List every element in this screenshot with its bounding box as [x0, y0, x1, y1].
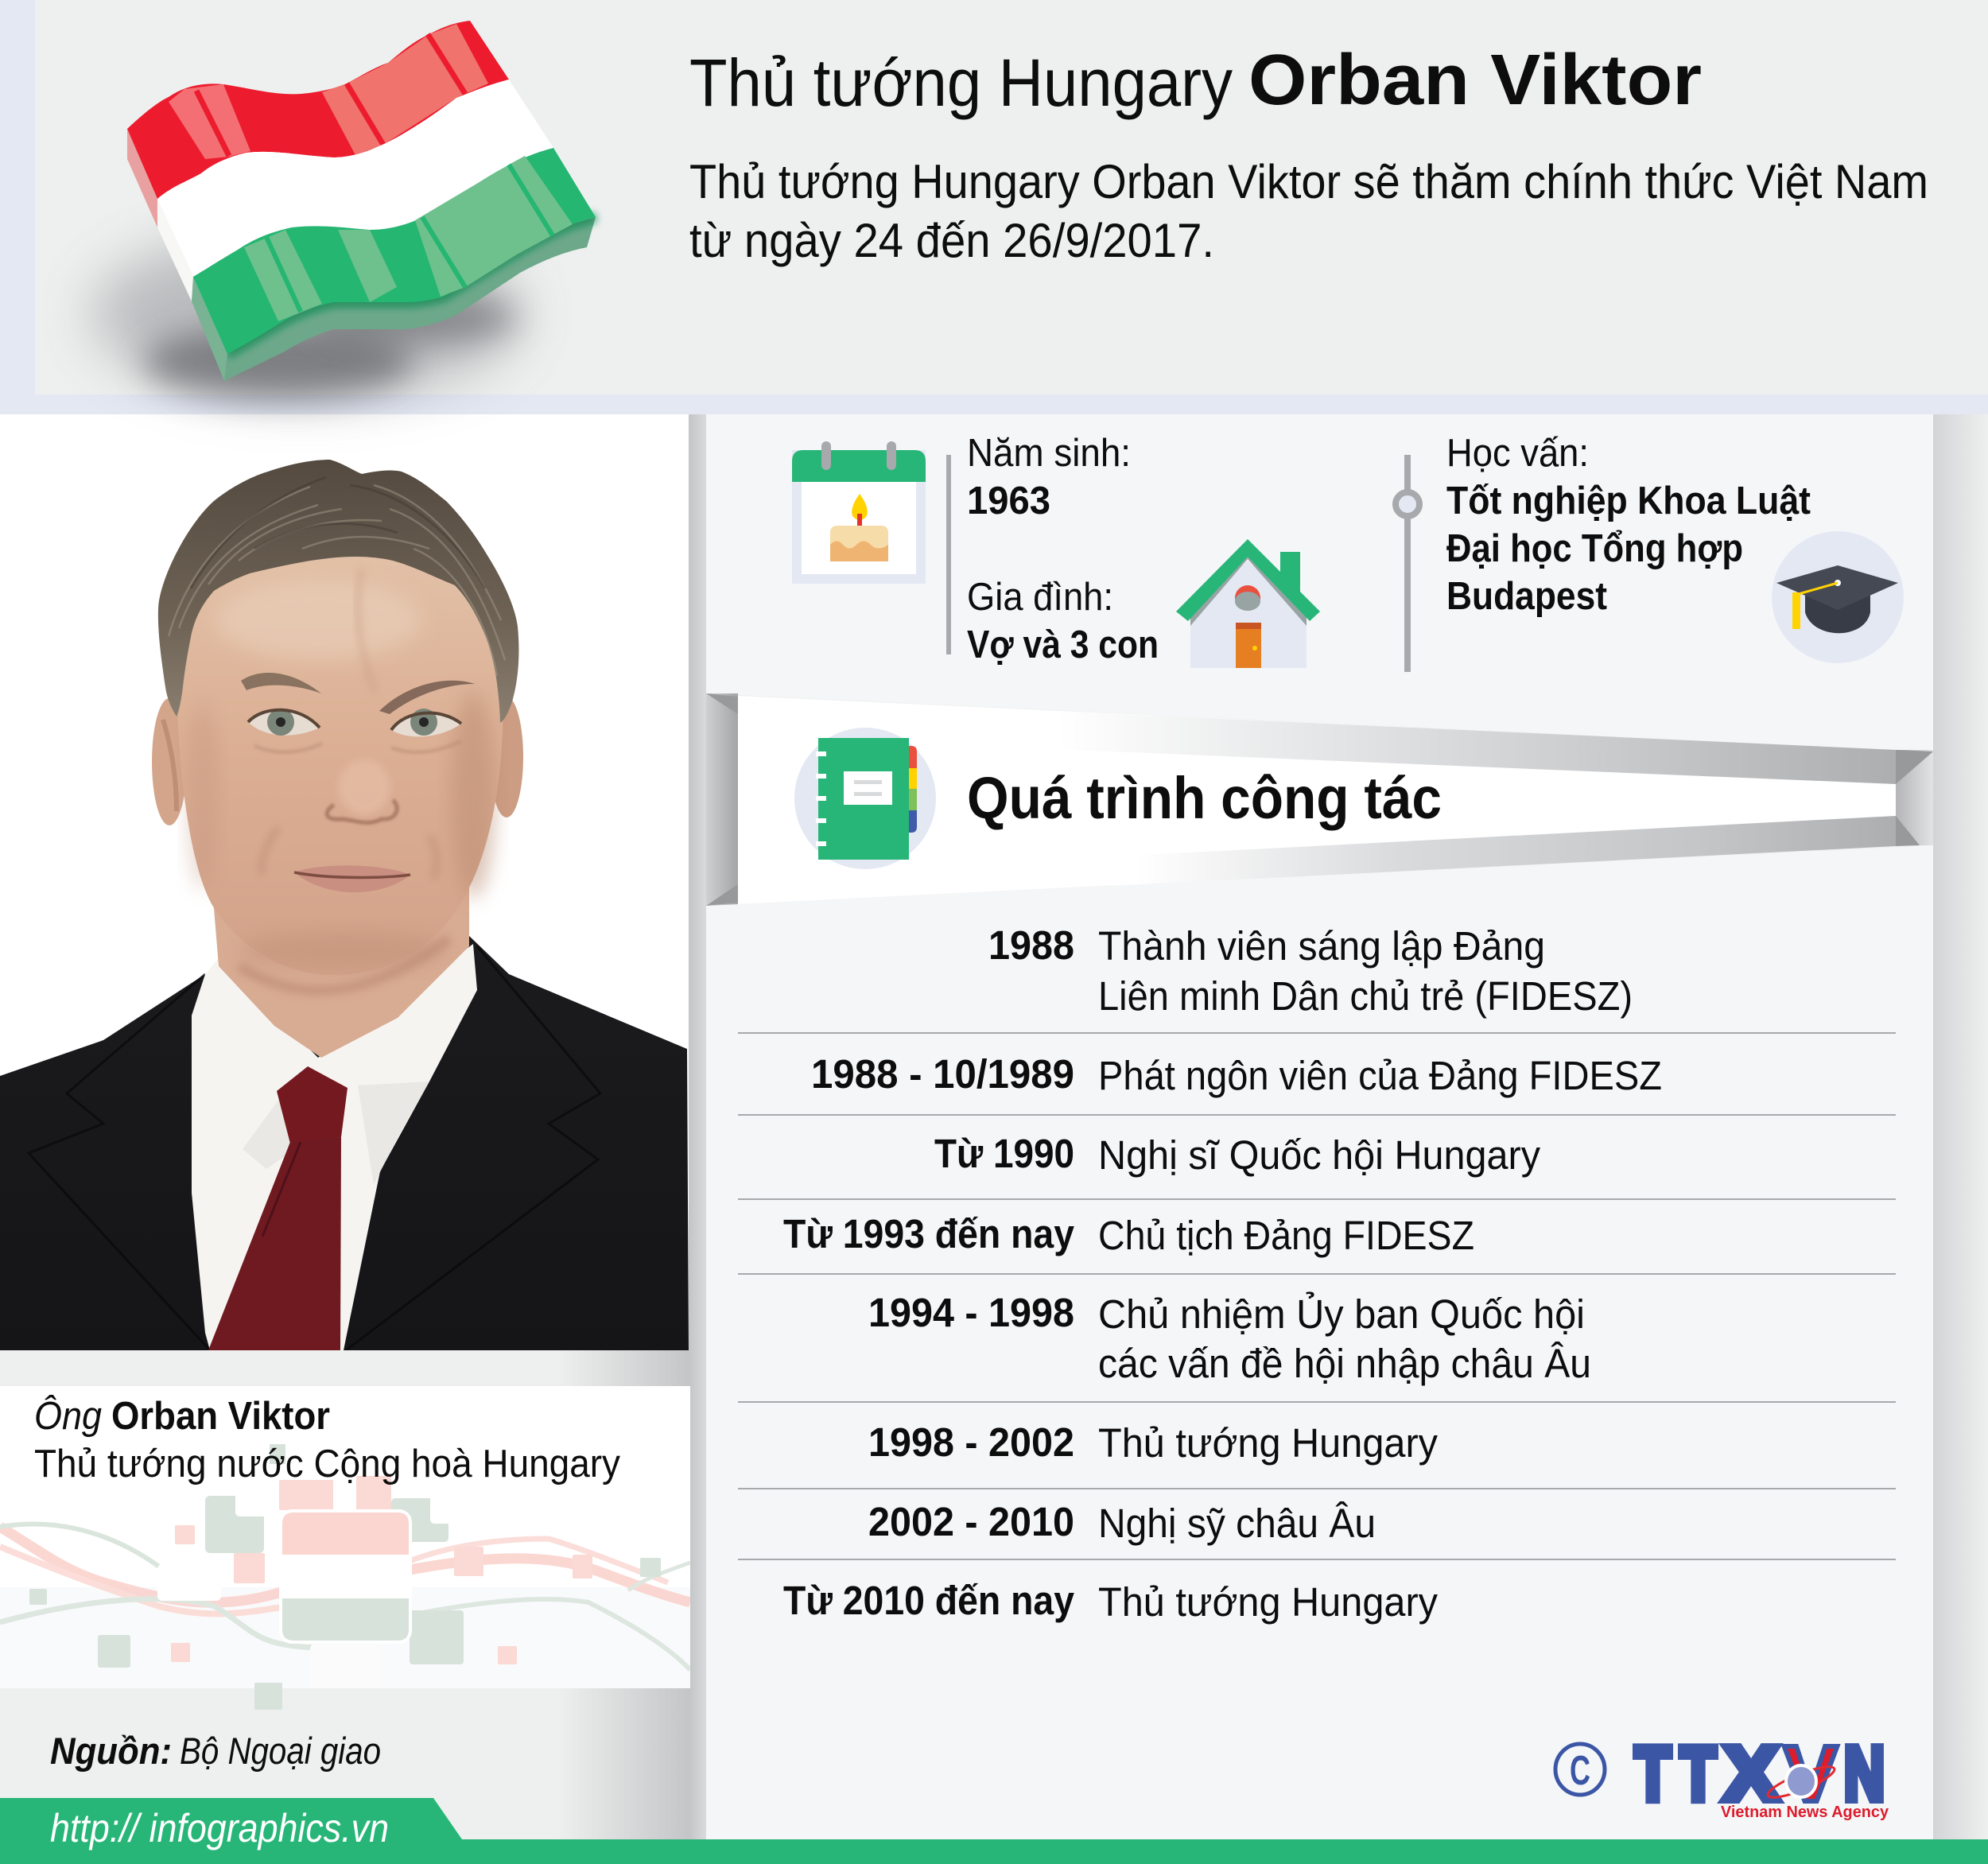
intro text: Thủ tướng Hungary Orban Viktor sẽ thăm chính thức Việt Nam: [689, 155, 1928, 208]
hair: [158, 460, 518, 723]
row from 2010: Thủ tướng Hungary: [1098, 1579, 1438, 1625]
row 1988: Thành viên sáng lập Đảng: [1098, 923, 1545, 969]
source: Nguồn:: [50, 1730, 172, 1772]
globe emblem: [1765, 1761, 1837, 1803]
logo: copyright and TTXVN: [1555, 1730, 1889, 1821]
fold corner triangles: [706, 693, 1933, 906]
mouth: [294, 865, 410, 892]
source: Bộ Ngoại giao: [180, 1730, 381, 1772]
caption panel with decorative Hungarian flag tiles: [0, 1386, 690, 1695]
right gutter shading: [1933, 414, 1988, 1839]
face: [177, 538, 503, 975]
tile overflowing below caption panel: [254, 1683, 282, 1710]
caption text: Orban Viktor: [111, 1395, 330, 1438]
row 1998-2002: [868, 1419, 1438, 1466]
divider: personal info: [946, 455, 951, 654]
row from 1990: Nghị sĩ Quốc hội Hungary: [1098, 1132, 1540, 1178]
row 1998-2002: Thủ tướng Hungary: [1098, 1420, 1438, 1466]
intro text: [689, 155, 1928, 267]
row 1998-2002: 1998 - 2002: [868, 1419, 1074, 1465]
lapels: [29, 946, 600, 1350]
photo panel background: [0, 414, 689, 1350]
row 1988: 1988: [988, 922, 1074, 968]
title: [689, 41, 1702, 120]
family: [967, 576, 1159, 666]
title: Thủ tướng Hungary: [689, 45, 1233, 120]
row 2002-2010: Nghị sỹ châu Âu: [1098, 1501, 1376, 1546]
family: Vợ và 3 con: [967, 623, 1159, 666]
right content panel lower: [706, 845, 1933, 1839]
divider: education with marker: [1396, 455, 1419, 672]
red stripe: [127, 21, 509, 199]
row from 1990: Từ 1990: [934, 1131, 1074, 1176]
icon: graduation cap: [1772, 531, 1904, 663]
row from 2010: [783, 1578, 1438, 1625]
birth year: [967, 432, 1131, 522]
row 1994-1998: các vấn đề hội nhập châu Âu: [1098, 1341, 1591, 1386]
ribbon white band: [738, 696, 1896, 904]
family: Gia đình:: [967, 576, 1113, 619]
TTXVN wordmark: X: [1724, 1731, 1778, 1816]
portrait photo of Orban Viktor: [0, 460, 689, 1350]
icon: birthday calendar: [792, 441, 926, 584]
row 1988: [988, 922, 1633, 1019]
icon: notebook: [794, 728, 936, 869]
caption text: Ông: [34, 1395, 102, 1438]
eyes: [248, 709, 461, 752]
title: Orban Viktor: [1248, 41, 1702, 120]
row 1994-1998: 1994 - 1998: [868, 1290, 1074, 1335]
green stripe: [193, 148, 596, 354]
ears: [152, 698, 187, 825]
nose: [262, 760, 437, 879]
decorative tiles: [29, 1444, 661, 1668]
source: [50, 1730, 381, 1772]
footer bar with website: http:// infographics.vn: [50, 1806, 389, 1850]
shirt: [192, 944, 477, 1350]
flag shadow: [91, 231, 521, 398]
TTXVN wordmark: N: [1844, 1731, 1885, 1816]
footer bar with website: [0, 1798, 1988, 1864]
icon: house: [1176, 539, 1320, 668]
flag thickness: [224, 217, 596, 381]
row from 1990: [934, 1131, 1540, 1178]
row 1988-1989: Phát ngôn viên của Đảng FIDESZ: [1098, 1053, 1662, 1098]
row 2002-2010: [868, 1499, 1376, 1546]
section ribbon: work history: [706, 693, 1933, 906]
intro text: từ ngày 24 đến 26/9/2017.: [689, 214, 1214, 267]
row 1994-1998: Chủ nhiệm Ủy ban Quốc hội: [1098, 1291, 1585, 1337]
section heading: Quá trình công tác: [967, 765, 1442, 831]
birth year: 1963: [967, 480, 1050, 522]
tie: [208, 1066, 348, 1350]
header panel: [0, 0, 1988, 414]
Hungarian flag icon: [127, 21, 596, 381]
birth year: Năm sinh:: [967, 432, 1131, 475]
row 1988: Liên minh Dân chủ trẻ (FIDESZ): [1098, 973, 1633, 1019]
education: [1446, 432, 1811, 618]
hair strands: [169, 485, 505, 676]
row from 1993: Chủ tịch Đảng FIDESZ: [1098, 1213, 1474, 1258]
ribbon gap left: [706, 693, 738, 906]
TTXVN wordmark: [1635, 1730, 1885, 1819]
neck: [213, 875, 469, 1058]
row 1994-1998: [868, 1290, 1591, 1386]
lower fold shadow: [1113, 816, 1896, 886]
right content panel upper: [706, 414, 1933, 751]
copyright mark: C: [1570, 1748, 1590, 1794]
education: Budapest: [1446, 575, 1607, 618]
education: Đại học Tổng hợp: [1446, 527, 1743, 570]
education: Học vấn:: [1446, 432, 1589, 475]
row 1988-1989: 1988 - 10/1989: [811, 1051, 1074, 1097]
ribbon gap right: [1896, 750, 1933, 845]
eyebrows: [241, 673, 321, 693]
TTXVN wordmark: V: [1784, 1730, 1838, 1819]
education: Tốt nghiệp Khoa Luật: [1446, 480, 1811, 522]
row from 1993: [783, 1211, 1474, 1258]
row dividers: [738, 1032, 1896, 1560]
caption text: Thủ tướng nước Cộng hoà Hungary: [34, 1443, 620, 1485]
caption text: [34, 1395, 620, 1485]
row from 2010: Từ 2010 đến nay: [783, 1578, 1075, 1623]
TTXVN wordmark: T: [1680, 1731, 1716, 1816]
row from 1993: Từ 1993 đến nay: [783, 1211, 1075, 1256]
row 1988-1989: [811, 1051, 1662, 1098]
row 2002-2010: 2002 - 2010: [868, 1499, 1074, 1544]
upper fold shadow: [1034, 710, 1896, 784]
copyright mark: [1555, 1744, 1605, 1795]
agency tagline: Vietnam News Agency: [1721, 1804, 1889, 1821]
TTXVN wordmark: T: [1635, 1731, 1671, 1816]
decorative ribbons: [0, 1524, 690, 1670]
white stripe: [157, 80, 553, 277]
work history timeline: [738, 922, 1896, 1625]
left gutter shading: [557, 414, 706, 1839]
central flag tile: [279, 1509, 412, 1644]
suit jacket: [0, 935, 689, 1350]
